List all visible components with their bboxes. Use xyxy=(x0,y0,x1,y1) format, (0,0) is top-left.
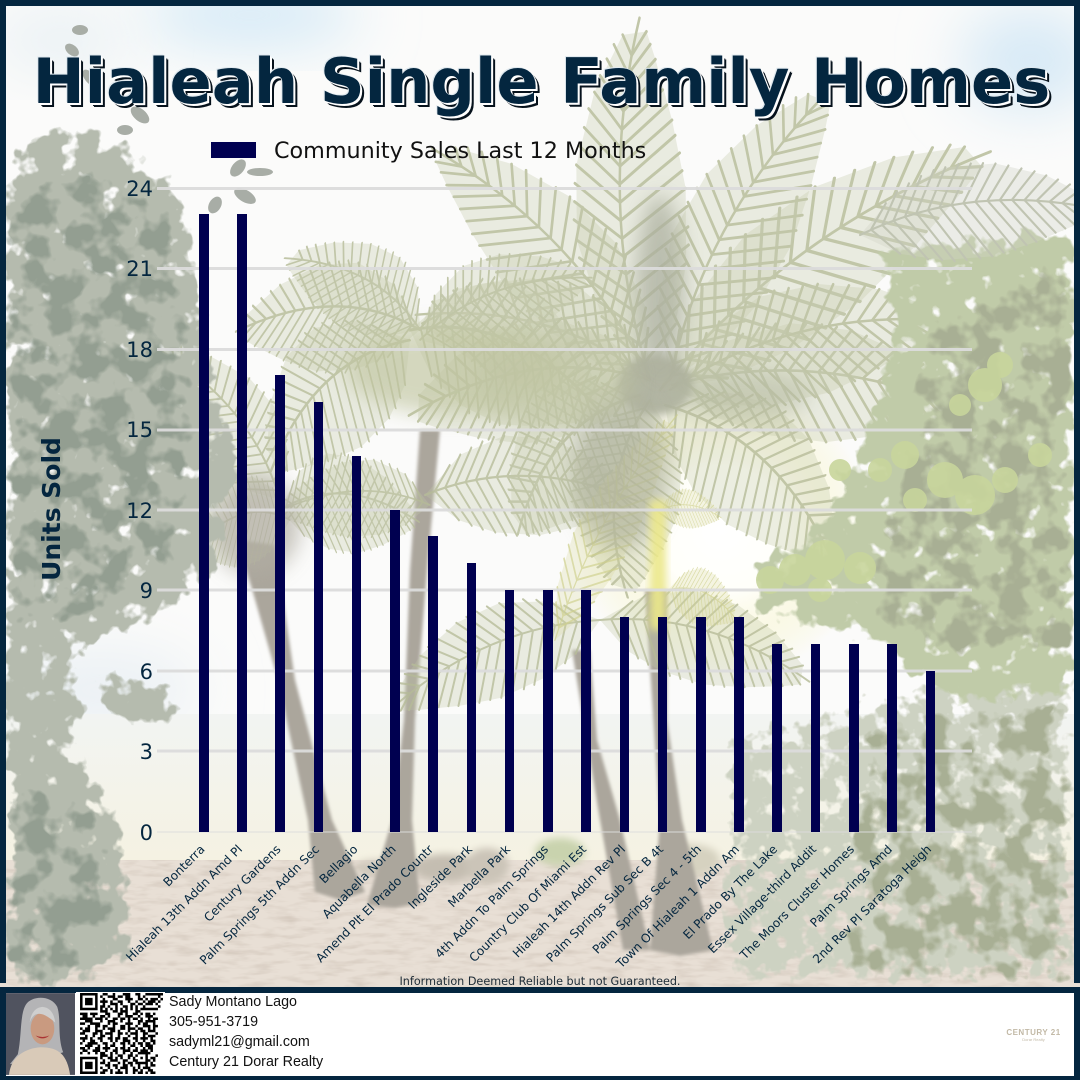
y axis labels: 0 xyxy=(140,821,153,845)
x axis labels: Amend Plt El Prado Countr xyxy=(313,842,436,965)
sand xyxy=(0,860,1080,987)
x axis labels: The Moors Cluster Homes xyxy=(737,842,857,963)
rocks and shoreline plants xyxy=(355,838,720,884)
foliage: left tree xyxy=(0,115,245,990)
contact details: Century 21 Dorar Realty xyxy=(169,1054,323,1070)
palm trunks xyxy=(238,430,713,956)
x axis labels: Bellagio xyxy=(317,842,361,886)
QR code xyxy=(76,992,165,1074)
sun glow xyxy=(572,380,872,680)
disclaimer: Information Deemed Reliable but not Guaranteed. xyxy=(400,975,680,988)
x axis labels: Marbella Park xyxy=(445,842,513,910)
y axis labels: 15 xyxy=(126,418,153,442)
legend: Community Sales Last 12 Months xyxy=(274,138,646,164)
title: Hialeah Single Family Homes xyxy=(33,45,1050,118)
x axis labels: Palm Springs Amd xyxy=(807,842,895,930)
x axis labels: 4th Addn To Palm Springs xyxy=(432,842,551,961)
x axis labels: Town Of Hialeah 1 Addn Am xyxy=(613,842,742,972)
y axis labels: 24 xyxy=(126,177,153,201)
y axis labels: 18 xyxy=(126,338,153,362)
sea xyxy=(0,714,1080,864)
foliage: right tree xyxy=(715,210,1080,990)
contact details: Sady Montano Lago xyxy=(169,994,297,1010)
agent portrait xyxy=(6,993,75,1075)
y axis labels: 3 xyxy=(140,740,153,764)
logo: Century 21: Dorar Realty xyxy=(1022,1037,1045,1042)
bars xyxy=(199,214,935,832)
palm fronds xyxy=(140,15,1007,726)
palm frond over the top right xyxy=(849,133,1080,286)
x axis labels: Essex Village-third Addit xyxy=(705,842,819,956)
footer band xyxy=(0,987,1080,1080)
sky xyxy=(0,0,1080,720)
x axis labels xyxy=(123,842,934,972)
x axis labels: Ingleside Park xyxy=(405,842,475,912)
logo: Century 21 xyxy=(1006,1028,1061,1042)
x axis labels: Palm Springs 5th Addn Sec xyxy=(197,842,322,967)
y axis labels: 21 xyxy=(126,257,153,281)
x axis labels: Hialeah 13th Addn Amd Pl xyxy=(123,842,245,964)
x axis labels: Hialeah 14th Addn Rev Pl xyxy=(510,842,628,960)
y axis labels xyxy=(126,177,153,845)
x axis labels: Country Club Of Miami Est xyxy=(467,842,589,965)
x axis labels: Aquabella North xyxy=(320,842,399,921)
x axis labels: Palm Springs Sub Sec B 4t xyxy=(544,842,666,965)
contact details: sadyml21@gmail.com xyxy=(169,1034,310,1050)
x axis labels: Palm Springs Sec 4 - 5th xyxy=(590,842,704,957)
y axis title: Units Sold xyxy=(37,437,66,581)
y axis labels: 9 xyxy=(140,579,153,603)
x axis labels: El Prado By The Lake xyxy=(680,842,780,942)
y axis labels: 6 xyxy=(140,660,153,684)
contact details: 305-951-3719 xyxy=(169,1014,258,1030)
dark crown masses xyxy=(636,195,684,385)
x axis labels: Bonterra xyxy=(160,842,208,889)
leaves near the legend and top left xyxy=(63,25,273,216)
x axis labels: 2nd Rev Pl Saratoga Heigh xyxy=(810,842,934,966)
x axis labels: Century Gardens xyxy=(201,842,284,925)
y axis labels: 12 xyxy=(126,499,153,523)
contact details xyxy=(169,994,324,1070)
logo: Century 21: CENTURY 21 xyxy=(1006,1028,1061,1037)
